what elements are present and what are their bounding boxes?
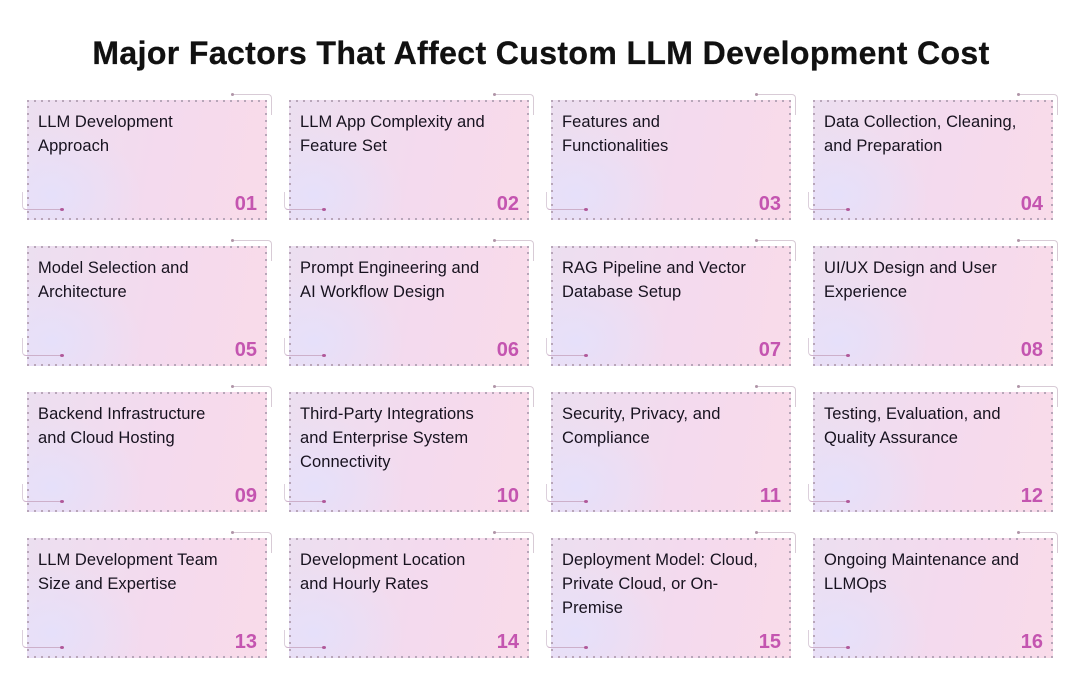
card 10: and Enterprise System bbox=[300, 429, 468, 447]
card 01: LLM Development bbox=[38, 113, 173, 131]
card 14: Development Location bbox=[300, 551, 465, 569]
card 02 bbox=[289, 100, 529, 220]
card 05: Architecture bbox=[38, 283, 127, 301]
card 14 bbox=[289, 538, 529, 658]
card 07: 07 bbox=[759, 339, 781, 361]
card 06: Prompt Engineering and bbox=[300, 259, 479, 277]
card 03: Features and bbox=[562, 113, 660, 131]
card 11: Security, Privacy, and bbox=[562, 405, 720, 423]
card 08 bbox=[813, 246, 1053, 366]
card 04 bbox=[813, 100, 1053, 220]
card 02: Feature Set bbox=[300, 137, 387, 155]
card 01: 01 bbox=[235, 193, 257, 215]
title: Major Factors That Affect Custom LLM Development Cost bbox=[92, 35, 990, 71]
card 09: 09 bbox=[235, 485, 257, 507]
card 08: 08 bbox=[1021, 339, 1043, 361]
card 07: Database Setup bbox=[562, 283, 681, 301]
card 01: Approach bbox=[38, 137, 109, 155]
card 15: Premise bbox=[562, 599, 623, 617]
card 02: LLM App Complexity and bbox=[300, 113, 485, 131]
card 02: 02 bbox=[497, 193, 519, 215]
card 10: Connectivity bbox=[300, 453, 391, 471]
card 08: UI/UX Design and User bbox=[824, 259, 997, 277]
card 06: AI Workflow Design bbox=[300, 283, 445, 301]
card 15: Private Cloud, or On- bbox=[562, 575, 718, 593]
card 16: 16 bbox=[1021, 631, 1043, 653]
card 14: 14 bbox=[497, 631, 519, 653]
card 08: Experience bbox=[824, 283, 907, 301]
card 03: 03 bbox=[759, 193, 781, 215]
card 09: Backend Infrastructure bbox=[38, 405, 205, 423]
card 15: Deployment Model: Cloud, bbox=[562, 551, 758, 569]
card 15: 15 bbox=[759, 631, 781, 653]
card 09: and Cloud Hosting bbox=[38, 429, 175, 447]
card 10: Third-Party Integrations bbox=[300, 405, 474, 423]
card 03: Functionalities bbox=[562, 137, 668, 155]
card 05 bbox=[27, 246, 267, 366]
card 12 bbox=[813, 392, 1053, 512]
card 05: 05 bbox=[235, 339, 257, 361]
card 11: Compliance bbox=[562, 429, 650, 447]
card 07: RAG Pipeline and Vector bbox=[562, 259, 746, 277]
card 13: LLM Development Team bbox=[38, 551, 218, 569]
card 15 bbox=[551, 538, 791, 658]
card 05: Model Selection and bbox=[38, 259, 189, 277]
card 14: and Hourly Rates bbox=[300, 575, 428, 593]
card 13: 13 bbox=[235, 631, 257, 653]
card 04: Data Collection, Cleaning, bbox=[824, 113, 1016, 131]
card 11: 11 bbox=[760, 485, 781, 507]
card 13 bbox=[27, 538, 267, 658]
card 06: 06 bbox=[497, 339, 519, 361]
card 16 bbox=[813, 538, 1053, 658]
card 13: Size and Expertise bbox=[38, 575, 177, 593]
card 06 bbox=[289, 246, 529, 366]
card 12: Testing, Evaluation, and bbox=[824, 405, 1001, 423]
card 10 bbox=[289, 392, 529, 512]
card 12: Quality Assurance bbox=[824, 429, 958, 447]
card 11 bbox=[551, 392, 791, 512]
card 16: Ongoing Maintenance and bbox=[824, 551, 1019, 569]
card 09 bbox=[27, 392, 267, 512]
card 03 bbox=[551, 100, 791, 220]
card 01 bbox=[27, 100, 267, 220]
card 07 bbox=[551, 246, 791, 366]
card 04: 04 bbox=[1021, 193, 1043, 215]
card 16: LLMOps bbox=[824, 575, 887, 593]
card 04: and Preparation bbox=[824, 137, 942, 155]
card 12: 12 bbox=[1021, 485, 1043, 507]
card 10: 10 bbox=[497, 485, 519, 507]
